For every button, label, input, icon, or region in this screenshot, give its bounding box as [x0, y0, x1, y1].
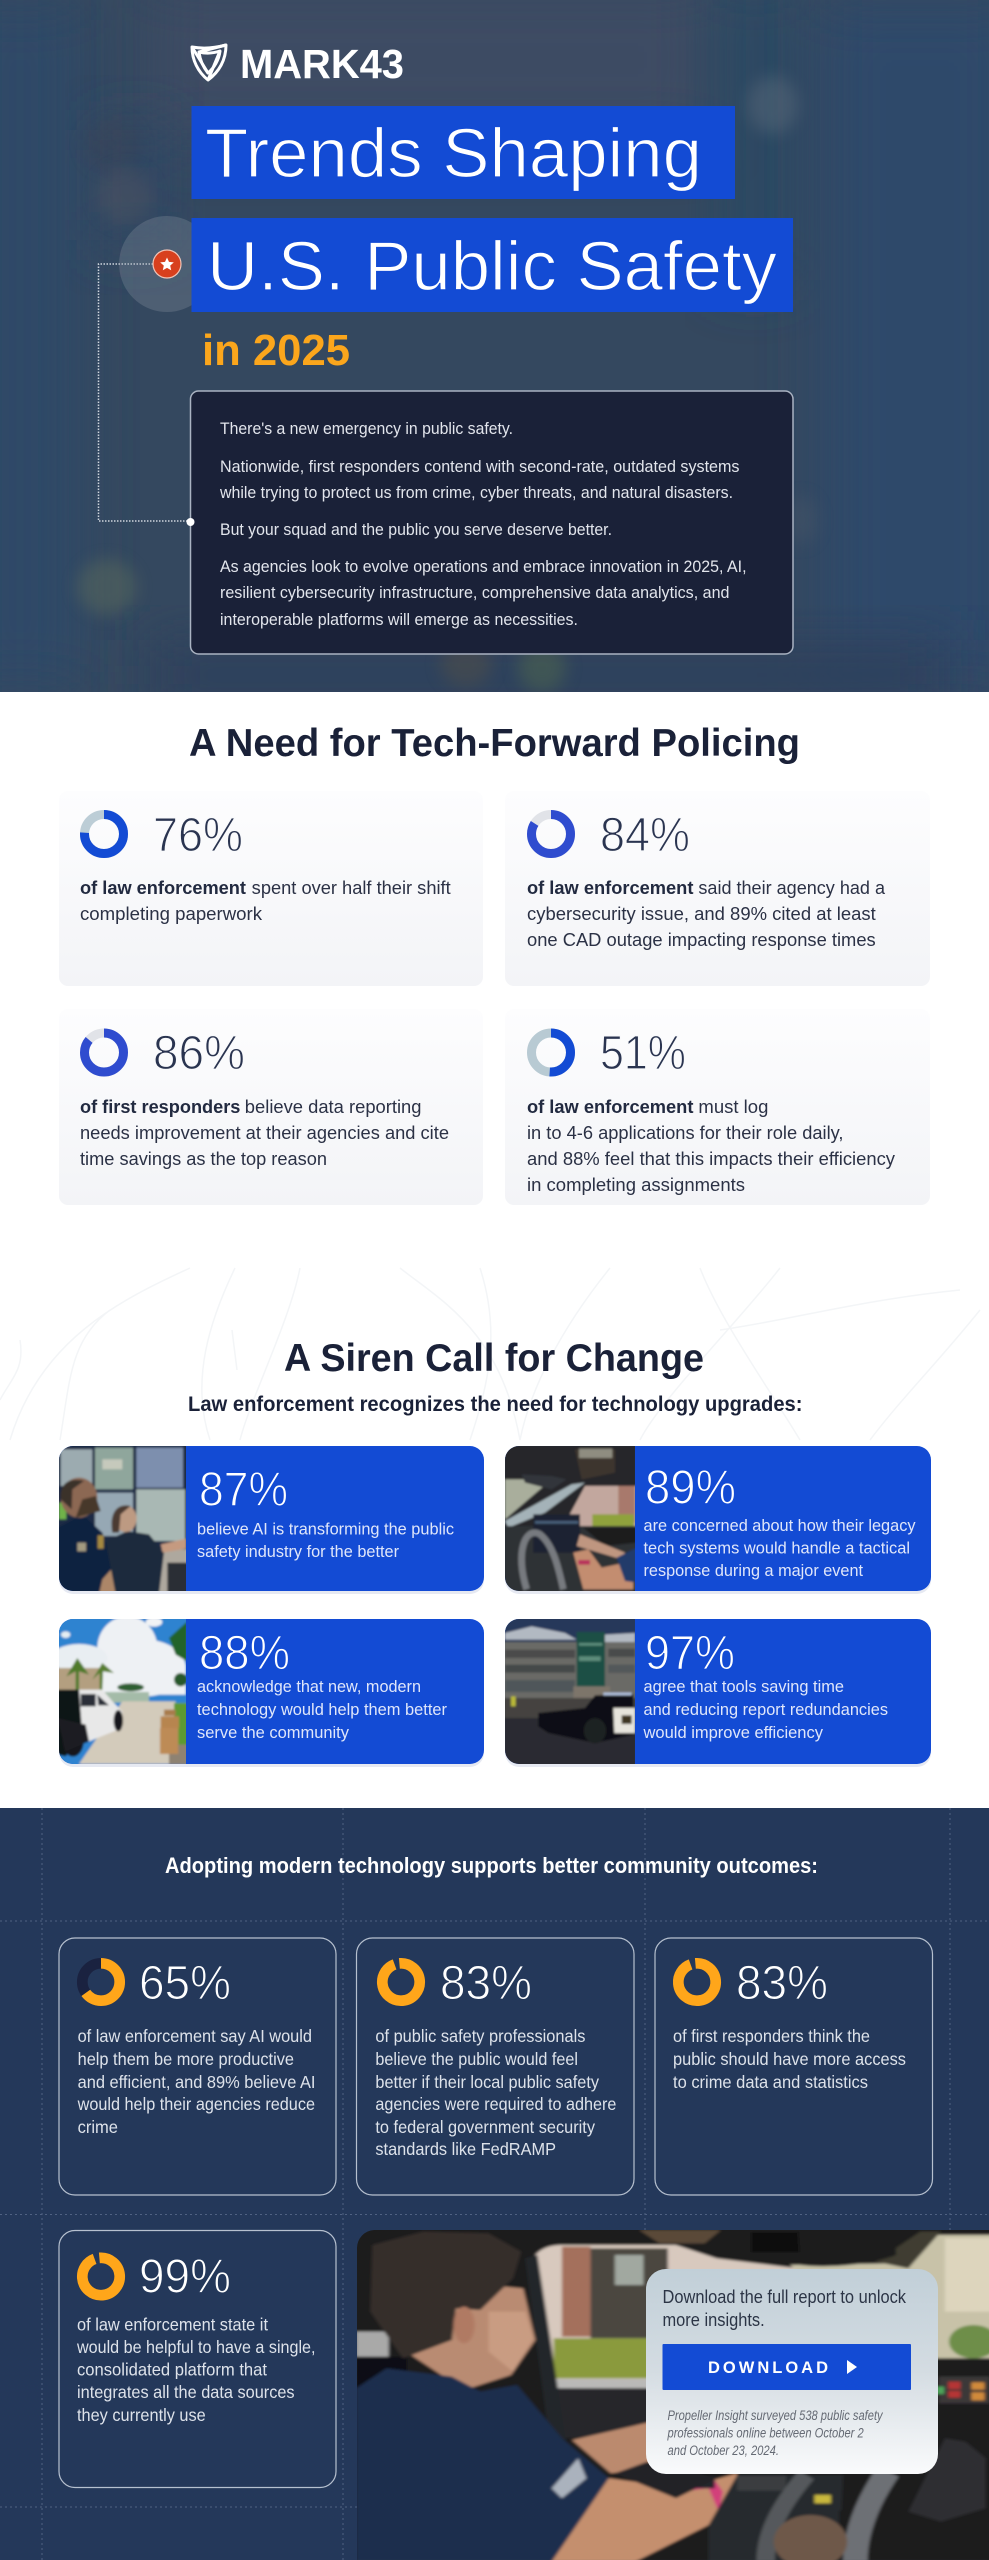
heading: A Need for Tech-Forward Policing: A Need for Tech-Forward Policing [189, 722, 800, 765]
panel: 83% stat, federal standards: believe the public would feel [375, 2049, 578, 2069]
panel: 83% stat, federal standards: agencies were required to adhere [375, 2094, 616, 2114]
section background: white [0, 692, 989, 1808]
panel: 83% stat, federal standards: 83% [440, 1957, 532, 2010]
panel: 86% stat: believe data reporting [245, 1097, 422, 1117]
panel: 89% stat: response during a major event [644, 1561, 863, 1580]
panel: 76% stat: spent over half their shift [252, 878, 451, 898]
panel: 97% stat: 97% [645, 1627, 735, 1680]
panel: 88% stat [51, 1616, 484, 1767]
panel: 51% stat: of law enforcement [527, 1097, 693, 1117]
heading: community outcomes: Adopting modern technology supports better community outcomes: [165, 1853, 818, 1878]
callout: download report: Propeller Insight surveyed 538 public safety [668, 2408, 884, 2423]
panel: 88% stat: acknowledge that new, modern [197, 1677, 421, 1696]
callout: download report: Download the full report to unlock [662, 2287, 907, 2307]
panel: 99% stat: 99% [139, 2250, 231, 2304]
callout: download report: and October 23, 2024. [668, 2443, 779, 2458]
panel: 76% stat: of law enforcement [80, 878, 246, 898]
panel: 65% stat: and efficient, and 89% believe AI [78, 2072, 315, 2092]
panel: intro text [190, 391, 793, 654]
section background: navy [0, 1808, 989, 2560]
photo: police car on street [59, 1619, 186, 1764]
heading: A Siren Call for Change: A Siren Call for Change [284, 1337, 704, 1380]
panel: 87% stat: 87% [199, 1464, 288, 1516]
panel: 89% stat: are concerned about how their legacy [644, 1516, 916, 1535]
panel: intro text: As agencies look to evolve operations and embrace innovation in 2025, AI, [220, 558, 746, 576]
panel: 99% stat: they currently use [77, 2405, 206, 2425]
panel: intro text: There's a new emergency in public safety. [220, 420, 513, 438]
photo: police car at building [503, 1616, 637, 1766]
panel: 99% stat: integrates all the data sources [77, 2382, 295, 2402]
panel: 84% stat: cybersecurity issue, and 89% cited at least [527, 904, 876, 924]
title: U.S. Public Safety: U.S. Public Safety [207, 227, 777, 305]
panel: 88% stat: 88% [199, 1627, 290, 1680]
panel: 76% stat: 76% [153, 809, 243, 862]
panel: 51% stat: and 88% feel that this impacts their efficiency [527, 1149, 895, 1169]
panel: 84% stat [505, 791, 930, 986]
panel: 89% stat [503, 1444, 931, 1594]
panel: 99% stat [59, 2230, 336, 2488]
panel: intro text: while trying to protect us from crime, cyber threats, and natural disasters. [219, 484, 733, 502]
panel: 83% stat, federal standards: to federal government security [375, 2117, 595, 2137]
panel: 83% stat, crime data: 83% [736, 1957, 828, 2010]
panel: 86% stat [59, 1009, 483, 1205]
panel: 65% stat: crime [78, 2117, 118, 2137]
panel: 83% stat, crime data: of first responders think the [673, 2026, 870, 2046]
icon: star badge [119, 216, 192, 312]
panel: 99% stat: of law enforcement state it [77, 2314, 268, 2334]
panel: 88% stat: technology would help them better [197, 1700, 447, 1719]
panel: 84% stat: of law enforcement [527, 878, 693, 898]
panel: 99% stat: consolidated platform that [77, 2360, 267, 2380]
dotted grid [0, 1808, 989, 2560]
panel: 87% stat: safety industry for the better [197, 1542, 399, 1561]
panel: 76% stat: completing paperwork [80, 904, 263, 924]
panel: 99% stat: would be helpful to have a single, [76, 2337, 316, 2357]
panel: 83% stat, federal standards [356, 1938, 634, 2195]
panel: 97% stat: would improve efficiency [643, 1723, 823, 1742]
panel: 84% stat: 84% [600, 809, 690, 862]
button: download [662, 2344, 911, 2390]
photo: laptop in patrol car [503, 1444, 637, 1594]
panel: 65% stat [59, 1938, 336, 2195]
panel: 51% stat: in to 4-6 applications for their role daily, [527, 1123, 844, 1143]
panel: 51% stat: 51% [600, 1027, 686, 1080]
title: Trends Shaping: Trends Shaping [205, 114, 702, 192]
panel: 51% stat: in completing assignments [527, 1175, 745, 1195]
logo: Mark43: MARK43 [240, 41, 404, 87]
panel: 83% stat, crime data: to crime data and statistics [673, 2072, 868, 2092]
panel: 86% stat: time savings as the top reason [80, 1149, 327, 1169]
panel: 89% stat: tech systems would handle a tactical [644, 1538, 910, 1558]
faint map pattern [0, 1268, 980, 1440]
panel: intro text: Nationwide, first responders contend with second-rate, outdated systems [220, 458, 740, 476]
panel: 51% stat: must log [698, 1097, 768, 1117]
panel: 83% stat, federal standards: standards like FedRAMP [375, 2139, 556, 2159]
connector: dotted line from star badge to intro box [98, 264, 190, 521]
panel: 86% stat: needs improvement at their agencies and cite [80, 1123, 449, 1143]
panel: 97% stat: agree that tools saving time [644, 1677, 844, 1696]
panel: 65% stat: 65% [139, 1957, 231, 2010]
button: download: DOWNLOAD [708, 2359, 828, 2377]
callout: download report: professionals online between October 2 [667, 2426, 864, 2440]
panel: intro text: But your squad and the public you serve deserve better. [220, 521, 612, 539]
panel: 87% stat: believe AI is transforming the public [197, 1520, 454, 1538]
panel: 87% stat [57, 1444, 484, 1594]
panel: 65% stat: would help their agencies reduce [77, 2094, 315, 2114]
callout: download report [646, 2269, 938, 2474]
photo: officers at monitors [57, 1444, 189, 1594]
panel: 84% stat: said their agency had a [698, 878, 886, 898]
panel: 76% stat [59, 791, 483, 986]
panel: 83% stat, federal standards: of public safety professionals [375, 2026, 586, 2046]
panel: 65% stat: help them be more productive [78, 2049, 294, 2069]
panel: 88% stat: serve the community [197, 1723, 349, 1742]
panel: 51% stat [505, 1009, 930, 1205]
panel: 83% stat, federal standards: better if their local public safety [375, 2072, 599, 2092]
subheading: technology upgrades: Law enforcement recognizes the need for technology upgrades: [188, 1392, 802, 1416]
photo: officer in patrol car [350, 2225, 989, 2560]
panel: intro text: interoperable platforms will emerge as necessities. [220, 611, 578, 629]
connector end dot [186, 518, 194, 526]
panel: 83% stat, crime data [655, 1938, 932, 2195]
hero section background [0, 0, 989, 710]
callout: download report: more insights. [662, 2310, 765, 2330]
title: in 2025: in 2025 [202, 326, 350, 375]
panel: 84% stat: one CAD outage impacting response times [527, 930, 876, 950]
panel: 97% stat: and reducing report redundancies [644, 1700, 888, 1719]
panel: 97% stat [503, 1616, 931, 1767]
panel: 86% stat: 86% [153, 1027, 245, 1080]
panel: 86% stat: of first responders [80, 1097, 240, 1117]
panel: 65% stat: of law enforcement say AI would [78, 2026, 312, 2046]
panel: intro text: resilient cybersecurity infrastructure, comprehensive data analytics, and [220, 584, 730, 602]
panel: 89% stat: 89% [645, 1462, 736, 1514]
panel: 83% stat, crime data: public should have more access [673, 2049, 906, 2069]
